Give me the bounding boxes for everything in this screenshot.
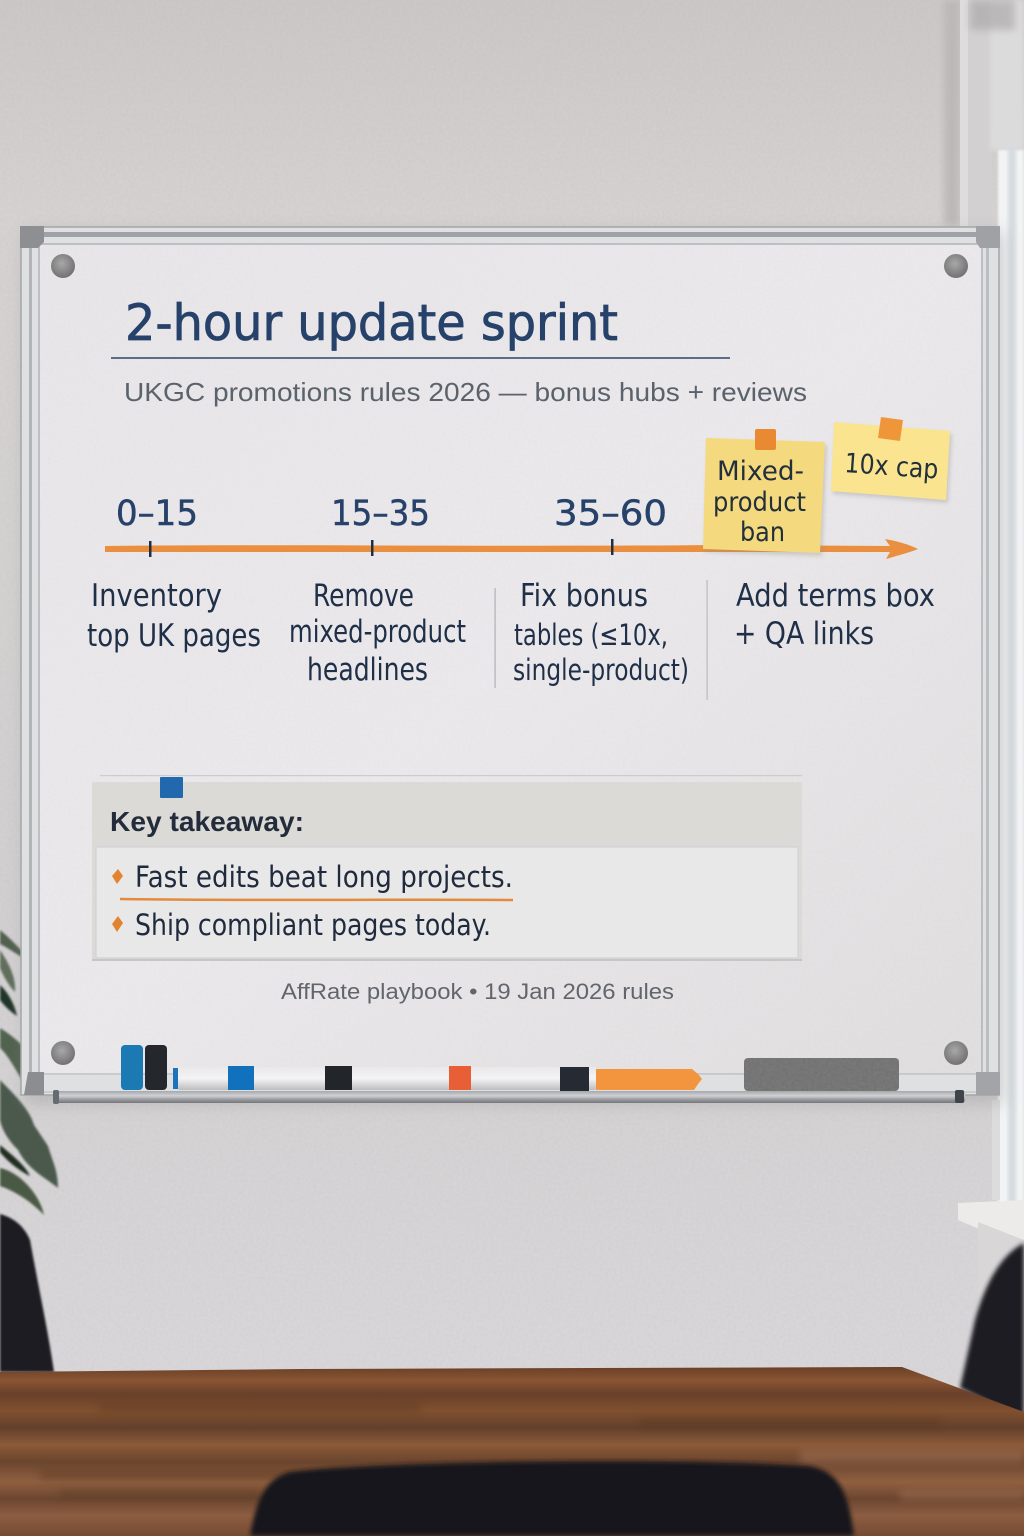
window and blinds (944, 0, 1024, 1345)
foreground chair (250, 1461, 854, 1536)
mounting screw bottom left (51, 1041, 75, 1065)
subtitle: UKGC promotions rules 2026 — bonus hubs + reviews (124, 377, 807, 407)
blue tape (160, 777, 183, 798)
step 4 text (734, 578, 935, 652)
bullet 1: Fast edits beat long projects. (135, 860, 513, 894)
step 2 text: mixed-product (289, 614, 466, 650)
writing surface (39, 244, 982, 1074)
step 2 text (289, 578, 466, 688)
whiteboard (20, 226, 1004, 1104)
step 4 text: Add terms box (736, 578, 935, 614)
sticky note: mixed-product ban: ban (740, 517, 785, 548)
tape (755, 429, 776, 450)
sticky note: mixed-product ban (703, 429, 827, 556)
sticky note: mixed-product ban: Mixed- (717, 456, 804, 487)
underline (120, 899, 513, 900)
step 1 text: top UK pages (87, 618, 261, 654)
bullet 2: Ship compliant pages today. (135, 908, 491, 942)
right chair (960, 1243, 1024, 1420)
step 4 text: + QA links (734, 616, 874, 652)
step 3 text: single-product) (513, 653, 689, 687)
time label 0-15: 0–15 (116, 494, 198, 534)
step 3 text: tables (≤10x, (514, 618, 668, 652)
board shadow (24, 232, 1004, 1104)
lower frame rail (41, 1074, 981, 1092)
step 1 text: Inventory (91, 578, 222, 614)
time label 15-35: 15–35 (331, 494, 430, 534)
orange arrow (105, 539, 918, 559)
footer note: AffRate playbook • 19 Jan 2026 rules (281, 979, 674, 1004)
tick 1 (149, 541, 152, 557)
marker caps (121, 1045, 167, 1090)
plant (0, 930, 58, 1215)
eraser (744, 1058, 899, 1091)
tape (878, 417, 903, 441)
step 2 text: Remove (313, 578, 414, 614)
step 2 text: headlines (307, 652, 428, 688)
title underline (111, 357, 730, 359)
left chair (0, 1214, 54, 1372)
step 3 text: Fix bonus (520, 578, 648, 614)
timeline (105, 494, 918, 559)
mounting screw top right (944, 254, 968, 278)
key takeaway panel (92, 775, 802, 961)
tick 2 (371, 540, 374, 556)
heading: Key takeaway: (110, 806, 304, 837)
time label 35-60: 35–60 (554, 494, 667, 534)
aluminium frame (21, 227, 999, 1095)
sticky note: 10x cap (831, 417, 952, 503)
tick 3 (611, 539, 614, 555)
marker tray (53, 1090, 965, 1104)
mounting screw bottom right (944, 1041, 968, 1065)
sticky note: 10x cap: 10x cap (844, 448, 939, 486)
sticky note: mixed-product ban: product (713, 487, 806, 518)
step 1 text (87, 578, 261, 654)
table (0, 1367, 1024, 1536)
long marker (173, 1066, 702, 1091)
mounting screw top left (51, 254, 75, 278)
title: 2-hour update sprint (125, 294, 618, 352)
step 3 text (513, 578, 689, 687)
frame corners (20, 226, 44, 248)
